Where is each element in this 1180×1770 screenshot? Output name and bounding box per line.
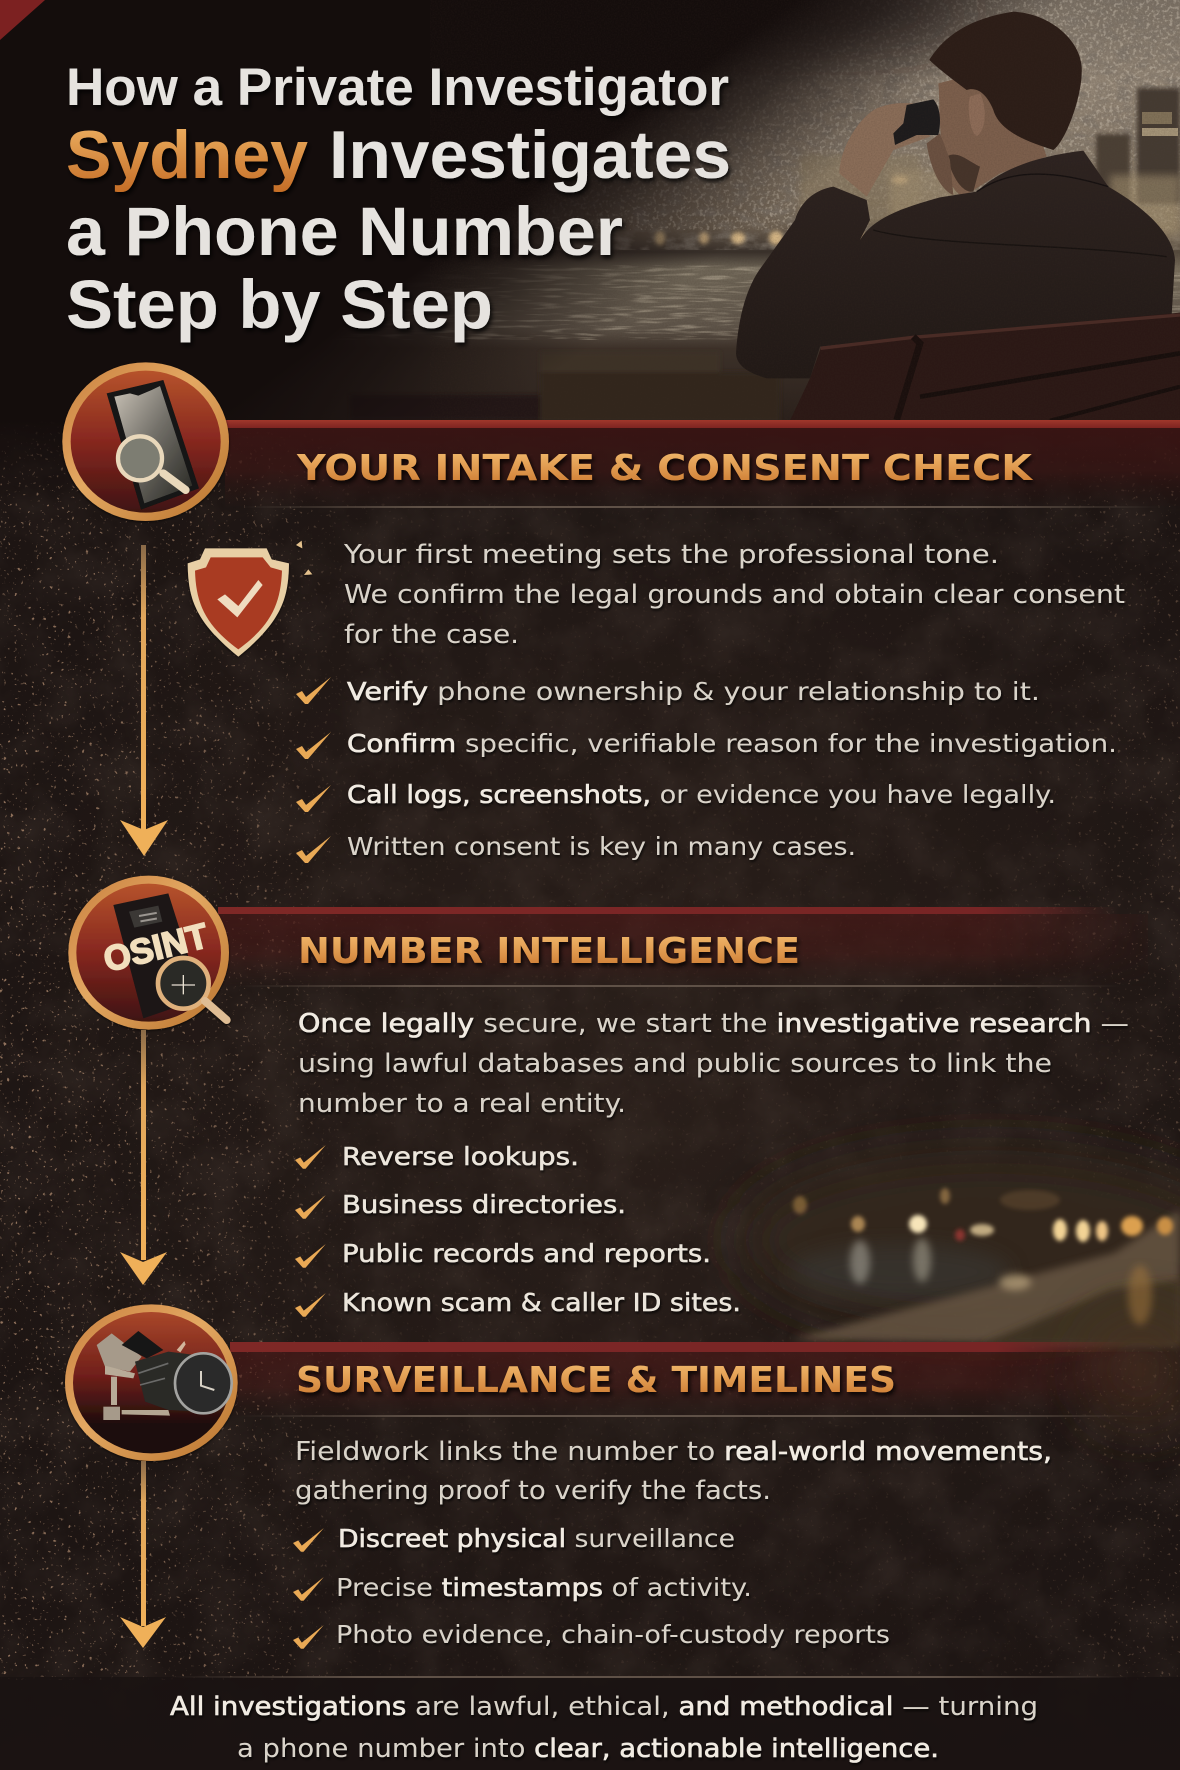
checklist: Call logs, screenshots, or evidence you have legally. — [347, 780, 1056, 809]
section 3 heading: SURVEILLANCE & TIMELINES — [296, 1360, 896, 1401]
intro text: Fieldwork links the number to real-world movements, — [295, 1437, 1052, 1467]
checklist — [296, 677, 1117, 863]
intro text: for the case. — [344, 620, 519, 650]
neck and face — [938, 73, 1047, 197]
checklist: Verify phone ownership & your relationship to it. — [347, 677, 1040, 706]
title: How a Private Investigator — [66, 58, 729, 117]
checklist: Public records and reports. — [342, 1239, 711, 1268]
page background — [0, 432, 1180, 1680]
arrow — [120, 1461, 166, 1648]
section 2 header band — [218, 907, 1148, 987]
intro text — [295, 1437, 1052, 1506]
intro text: Once legally secure, we start the investigative research — — [298, 1009, 1129, 1039]
hand — [839, 103, 930, 197]
icon: shield with check — [188, 541, 312, 657]
icon: phone and magnifier — [62, 362, 229, 521]
section 1 heading: YOUR INTAKE & CONSENT CHECK — [296, 448, 1033, 489]
footer statement: All investigations are lawful, ethical, and methodical — turning — [170, 1692, 1038, 1722]
checklist: Business directories. — [342, 1190, 626, 1219]
harbour lights — [655, 176, 908, 246]
intro text: We confirm the legal grounds and obtain clear consent — [344, 580, 1125, 610]
checklist: Known scam & caller ID sites. — [342, 1288, 741, 1317]
title: Step by Step — [66, 266, 493, 343]
hero photo: investigator with binoculars at the harbour — [0, 0, 1180, 422]
checklist: Written consent is key in many cases. — [347, 832, 856, 861]
title: Sydney — [66, 117, 308, 193]
checklist: Reverse lookups. — [342, 1142, 579, 1171]
skyline — [800, 88, 1180, 235]
section 1 header band — [225, 420, 1180, 508]
darkness behind title — [0, 0, 1180, 420]
section 2 heading: NUMBER INTELLIGENCE — [298, 931, 800, 972]
arrow — [120, 1030, 167, 1285]
panel: number intelligence — [68, 876, 1148, 1317]
intro text — [343, 540, 1125, 650]
icon: surveillance camera with clock — [65, 1304, 238, 1461]
footer statement — [0, 1676, 1180, 1770]
intro text: gathering proof to verify the facts. — [295, 1476, 771, 1506]
hair — [929, 12, 1082, 150]
jacket — [736, 151, 1175, 378]
intro text — [298, 1009, 1129, 1119]
checklist — [293, 1524, 890, 1649]
intro text: Your first meeting sets the professional tone. — [343, 540, 999, 570]
checklist — [295, 1142, 741, 1317]
checklist: Discreet physical surveillance — [338, 1524, 735, 1553]
intro text: using lawful databases and public sources to link the — [298, 1049, 1052, 1079]
corner accent — [0, 0, 45, 40]
title: a Phone Number — [66, 193, 623, 270]
icon: OSINT phone and magnifier — [68, 876, 229, 1030]
footer statement: a phone number into clear, actionable intelligence. — [237, 1734, 939, 1764]
binoculars — [893, 99, 940, 145]
panel: surveillance and timelines — [65, 1304, 1180, 1649]
icon: OSINT phone and magnifier: OSINT — [100, 916, 212, 980]
arrow — [120, 545, 168, 856]
bottom harbour photo — [740, 1150, 1180, 1430]
checklist: Precise timestamps of activity. — [336, 1573, 752, 1602]
intro text: number to a real entity. — [298, 1089, 626, 1119]
man — [736, 12, 1180, 421]
checklist: Confirm specific, verifiable reason for the investigation. — [347, 729, 1117, 758]
panel: your intake and consent check — [62, 362, 1180, 863]
section 3 header band — [230, 1342, 1180, 1417]
title — [66, 58, 731, 343]
bench — [790, 313, 1180, 421]
stone wall — [350, 352, 780, 422]
title: Investigates — [329, 117, 731, 193]
checklist: Photo evidence, chain-of-custody reports — [336, 1620, 890, 1649]
